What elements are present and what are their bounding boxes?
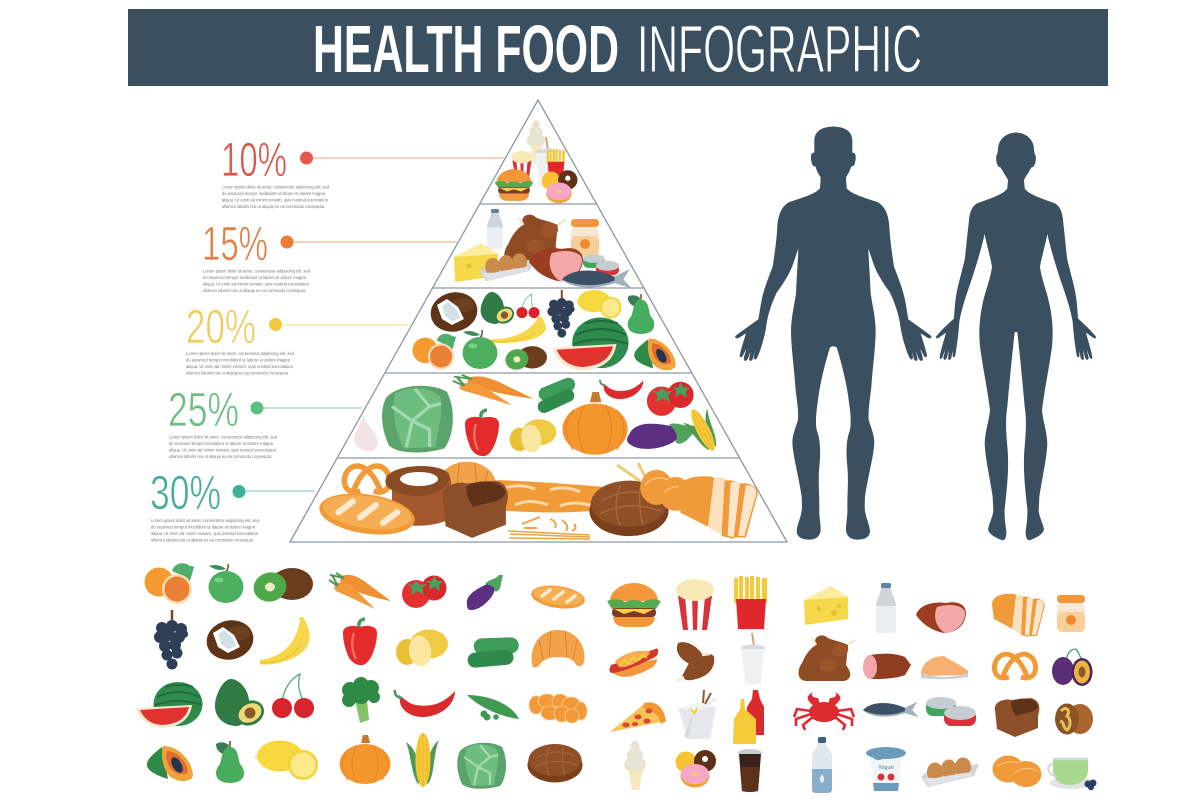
icon: braided bread (529, 694, 587, 723)
icon: watermelon (136, 682, 202, 728)
icon: walnut (1055, 704, 1093, 734)
icon: bread (530, 582, 586, 612)
icon: donuts (676, 750, 716, 788)
icon: lemon (254, 740, 318, 780)
kulich bread ring (385, 466, 451, 526)
callout: 10 percent (221, 134, 505, 209)
callout: 15 percent: do eiusmod tempor incididunt ut labore et dolore magna (203, 275, 307, 280)
callout: 20 percent: aliqua. Ut enim ad minim veniam, quis nostrud exercitation (186, 364, 294, 369)
callout: 10 percent: ullamco laboris nisi ut aliquip ex ea commodo consequat. (222, 204, 325, 209)
callout: 20 percent: ullamco laboris nisi ut aliquip ex ea commodo consequat. (186, 370, 289, 375)
callout: 30 percent: do eiusmod tempor incididunt ut labore et dolore magna (151, 524, 256, 530)
icon: pizza (610, 702, 666, 732)
icon: croissant (532, 630, 584, 668)
icon: burger (607, 583, 661, 627)
food pyramid (290, 100, 787, 542)
icon: green tea (1048, 759, 1096, 790)
icon: rye loaf (995, 698, 1039, 737)
title: Health Food: HEALTH FOOD (313, 12, 619, 87)
icon: milk (876, 583, 896, 633)
icon: coffee (738, 749, 762, 792)
title: Infographic: INFOGRAPHIC (637, 12, 922, 87)
icon: ham (916, 602, 966, 633)
icon: potato (396, 630, 448, 668)
icon: orange (144, 563, 194, 604)
icon: corn (406, 733, 439, 787)
food icon grid (136, 563, 1096, 793)
callout: 15 percent: ullamco laboris nisi ut aliquip ex ea commodo consequat. (203, 288, 306, 293)
callout: 10 percent: aliqua. Ut enim ad minim veniam, quis nostrud exercitation (222, 197, 329, 202)
garlic (354, 413, 378, 451)
icon: peas (467, 695, 519, 720)
callout: 10 percent: Lorem ipsum dolor sit amet, consectetur adipiscing elit, sed (222, 184, 330, 189)
callout: 30 percent: Lorem ipsum dolor sit amet, consectetur adipiscing elit, sed (151, 518, 260, 523)
icon: cheese (804, 586, 848, 625)
icon: ketchup and mustard (733, 690, 764, 744)
title banner (128, 9, 1108, 87)
icon: soda cup (741, 633, 765, 684)
callout: 25 percent: 25% (168, 384, 239, 437)
icon: banana (260, 617, 310, 665)
male silhouette (735, 127, 931, 540)
icon: pretzel (994, 654, 1036, 678)
female silhouette (936, 133, 1096, 540)
icon: chicken leg (677, 642, 714, 680)
icon: tomatoes (402, 576, 446, 608)
icon: popcorn (676, 579, 714, 630)
callout: 30 percent: ullamco laboris nisi ut aliquip ex ea commodo consequat. (151, 538, 254, 542)
icon: cabbage (457, 743, 506, 789)
callout: 15 percent: Lorem ipsum dolor sit amet, consectetur adipiscing elit, sed (203, 268, 311, 274)
icon: apple (208, 564, 244, 603)
icon: grapes (154, 610, 188, 670)
icon: cherries (272, 674, 314, 718)
baguette (497, 480, 605, 512)
icon: bell pepper (343, 619, 377, 665)
icon: chili (395, 690, 455, 717)
icon: water bottle (812, 737, 832, 793)
callout: 30 percent: aliqua. Ut enim ad minim veniam, quis nostrud exercitation (151, 531, 259, 536)
pyramid tier 4: vegetables (354, 375, 726, 472)
callout: 25 percent: do eiusmod tempor incididunt ut labore et dolore magna (169, 441, 274, 446)
icon: kiwi (250, 568, 313, 605)
callout: 10 percent: 10% (221, 134, 287, 187)
icon: hot dog (609, 648, 658, 677)
callout: 20 percent (186, 301, 408, 375)
icon: yogurt (866, 747, 906, 791)
callout: 15 percent: 15% (202, 218, 268, 271)
callout: 25 percent: aliqua. Ut enim ad minim veniam, quis nostrud exercitation (169, 448, 277, 452)
icon: round rye bread (528, 744, 582, 782)
icon: coconut (203, 616, 257, 664)
callout: 20 percent: do eiusmod tempor incididunt ut labore et dolore magna (186, 357, 291, 362)
icon: sausage (863, 654, 911, 679)
callout: 25 percent: Lorem ipsum dolor sit amet, consectetur adipiscing elit, sed (169, 434, 278, 440)
icon: pear (216, 741, 244, 783)
callout: 20 percent: Lorem ipsum dolor sit amet, consectetur adipiscing elit, sed (186, 351, 295, 356)
icon: crab (794, 692, 854, 730)
icon: fish (863, 702, 918, 717)
icon: salmon (921, 656, 968, 679)
icon: eggplant (467, 575, 503, 610)
callout: 30 percent (150, 467, 315, 542)
icon: jam jar (1057, 595, 1085, 632)
callout: 30 percent: 30% (150, 467, 221, 520)
icon: plum (1052, 649, 1092, 686)
icon: pumpkin (340, 735, 390, 784)
icon: noodle box (678, 690, 716, 739)
pyramid tier 2: protein and dairy (454, 209, 631, 288)
callout: 25 percent: ullamco laboris nisi ut aliquip ex ea commodo consequat. (169, 454, 272, 459)
icon: carrots (329, 573, 391, 609)
callout: 15 percent: aliqua. Ut enim ad minim veniam, quis nostrud exercitation (203, 282, 310, 286)
icon: canned food (926, 697, 976, 726)
callout: 20 percent: 20% (186, 301, 256, 354)
callout: 25 percent (168, 384, 362, 459)
pyramid tier 1: fast food (495, 120, 577, 203)
icon: broccoli (342, 677, 380, 723)
pasta (508, 517, 590, 539)
callout: 15 percent (202, 218, 457, 293)
callout: 10 percent: do eiusmod tempor incididunt ut labore et dolore magna (222, 191, 326, 196)
pyramid tier 5: bread and grains (317, 462, 758, 540)
icon: fries (734, 576, 767, 629)
icon: eggs (921, 758, 979, 787)
icon: cucumber (467, 637, 519, 668)
icon: roast turkey (799, 635, 855, 681)
wheat (617, 463, 648, 482)
icon: avocado (215, 679, 268, 730)
pyramid tier 3: fruit (412, 288, 676, 372)
icon: sliced loaf (992, 594, 1045, 637)
icon: ice cream (624, 740, 646, 790)
icon: buns (992, 756, 1042, 787)
icon: papaya (147, 746, 193, 781)
